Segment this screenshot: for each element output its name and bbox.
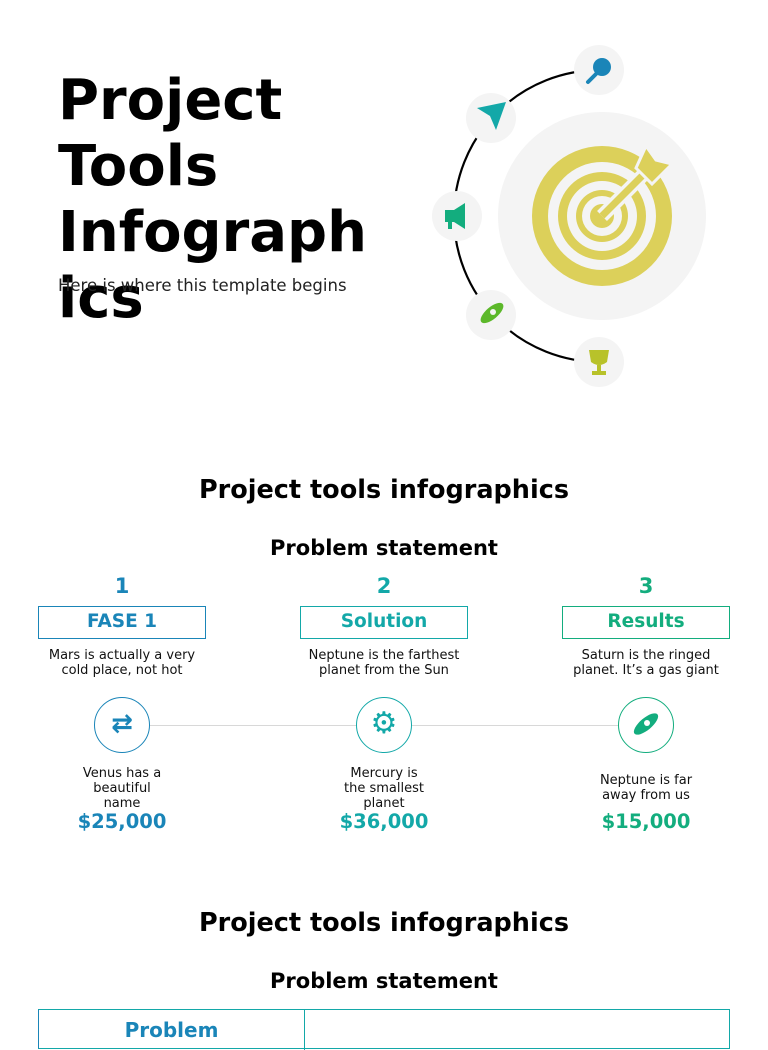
- note: the smallest: [344, 781, 424, 796]
- timeline connector: [150, 725, 620, 726]
- number 1: 1: [115, 574, 129, 598]
- note: away from us: [602, 788, 690, 803]
- title: ics: [58, 266, 144, 331]
- subtitle: Here is where this template begins: [58, 276, 347, 295]
- note: Neptune is far: [600, 773, 692, 788]
- icon: shuffle: ⇄: [111, 709, 133, 739]
- label box: Results: Results: [607, 611, 685, 632]
- description: Neptune is the farthest planet from the Sun: [309, 648, 459, 678]
- heading: section 1: Project tools infographics: [199, 475, 569, 505]
- amount: $36,000: [340, 810, 428, 833]
- hero graphic: target with icon arc: [432, 45, 706, 387]
- heading: section 2: Project tools infographics: [199, 908, 569, 938]
- column 2: [300, 574, 468, 833]
- table cell: Problem: [39, 1010, 305, 1050]
- title: Tools: [58, 134, 218, 199]
- number 3: 3: [639, 574, 653, 598]
- note: planet: [363, 796, 405, 811]
- icon: shuffle: [94, 697, 150, 753]
- subheading: problem statement 2: Problem statement: [270, 969, 498, 993]
- label box: Results: [562, 606, 730, 639]
- icon: rocket: [466, 290, 516, 340]
- icon: megaphone: [432, 191, 482, 241]
- icon: rocket: [618, 697, 674, 753]
- note: [344, 766, 424, 811]
- subheading: problem statement: Problem statement: [270, 536, 498, 560]
- title: Infograph: [58, 200, 367, 265]
- icon: target: [532, 146, 672, 286]
- note: name: [104, 796, 140, 811]
- description: Mars is actually a very cold place, not hot: [49, 648, 195, 678]
- number 2: 2: [377, 574, 391, 598]
- description: Saturn is the ringed planet. It’s a gas giant: [573, 648, 719, 678]
- note: [83, 766, 161, 811]
- label box: Solution: Solution: [341, 611, 427, 632]
- icon: trophy: [574, 337, 624, 387]
- label box: FASE 1: [38, 606, 206, 639]
- icon: magnifier: [574, 45, 624, 95]
- label box: FASE 1: FASE 1: [87, 611, 157, 632]
- title: [58, 68, 367, 331]
- table cell: Problem: Problem: [125, 1018, 218, 1042]
- amount: $15,000: [602, 810, 690, 833]
- amount: $25,000: [78, 810, 166, 833]
- note: [600, 773, 692, 803]
- icon: gear: [356, 697, 412, 753]
- title: Project: [58, 68, 282, 133]
- table: [38, 1009, 730, 1049]
- label box: Solution: [300, 606, 468, 639]
- note: Mercury is: [350, 766, 418, 781]
- icon: gear: ⚙: [371, 706, 397, 741]
- column 3: [562, 574, 730, 833]
- icon: paper plane: [466, 93, 516, 143]
- note: Venus has a: [83, 766, 161, 781]
- column 1: [38, 574, 206, 833]
- note: beautiful: [93, 781, 151, 796]
